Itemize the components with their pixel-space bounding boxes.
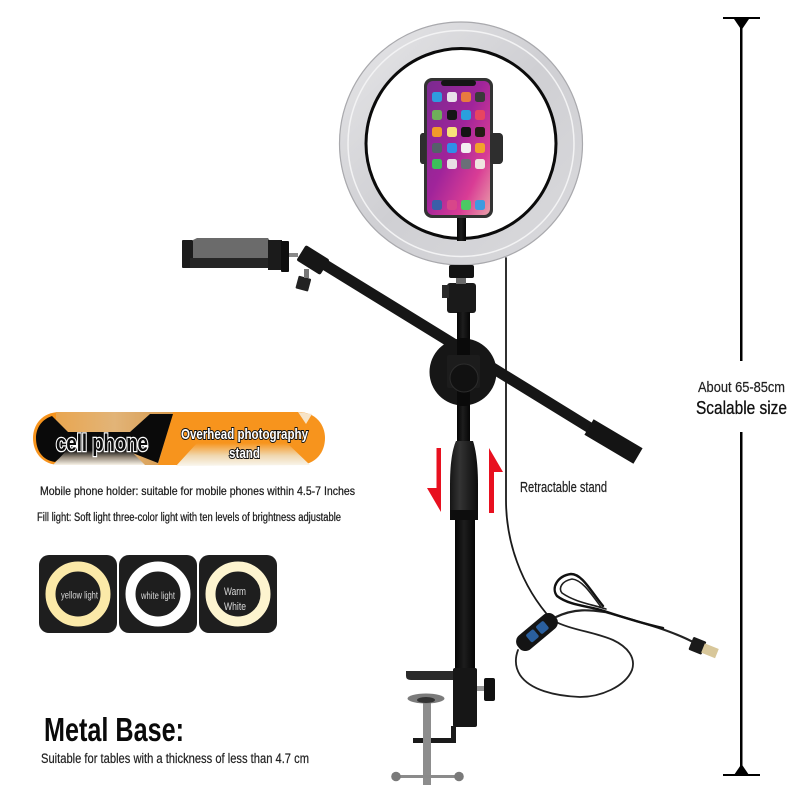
tile: yellow light — [39, 555, 117, 633]
dimmer controller — [513, 610, 561, 654]
ball head — [442, 278, 476, 313]
heading: metal base: Metal Base: — [44, 711, 184, 748]
round boom mount — [430, 338, 496, 406]
tile: warm white: White — [224, 601, 246, 613]
banner text: cell phone: cell phone — [56, 430, 148, 457]
ring light — [340, 22, 582, 265]
banner text: overhead photography stand: Overhead photography — [181, 426, 308, 443]
tile: white light: white light — [140, 591, 175, 602]
tile: warm white — [199, 555, 277, 633]
banner text: overhead photography stand — [181, 426, 308, 462]
phone holder on boom arm — [182, 238, 330, 292]
holder clip — [421, 133, 426, 164]
label: retractable stand: Retractable stand — [520, 480, 607, 496]
dimension line: height — [723, 17, 760, 776]
red arrow: up — [489, 448, 503, 513]
tile: warm white: Warm — [224, 586, 246, 598]
red arrow: down — [427, 448, 441, 512]
table clamp — [391, 668, 495, 785]
banner: cell phone / overhead photography stand — [33, 412, 325, 466]
text: table thickness: Suitable for tables with a thickness of less than 4.7 cm — [41, 751, 309, 766]
tile: yellow light: yellow light — [61, 590, 98, 602]
tile: white light — [119, 555, 197, 633]
label: height range — [696, 379, 787, 418]
banner text: overhead photography stand: stand — [229, 445, 260, 462]
counterweight grip — [589, 427, 638, 456]
boom arm — [322, 263, 638, 456]
text: fill light: Fill light: Soft light three-color light with ten levels of brightness adjustable — [37, 512, 341, 524]
app icons — [432, 92, 485, 210]
text: mobile phone holder: Mobile phone holder: suitable for mobile phones within 4.5-7 Inches — [40, 484, 355, 498]
telescopic grip — [450, 441, 478, 518]
phone in ring light — [420, 78, 503, 218]
stand: mast, grip, clamp — [391, 217, 496, 785]
label: height range: About 65-85cm — [698, 379, 785, 396]
label: height range: Scalable size — [696, 398, 787, 418]
USB plug — [688, 637, 720, 660]
power cable and dimmer controller — [506, 258, 720, 697]
